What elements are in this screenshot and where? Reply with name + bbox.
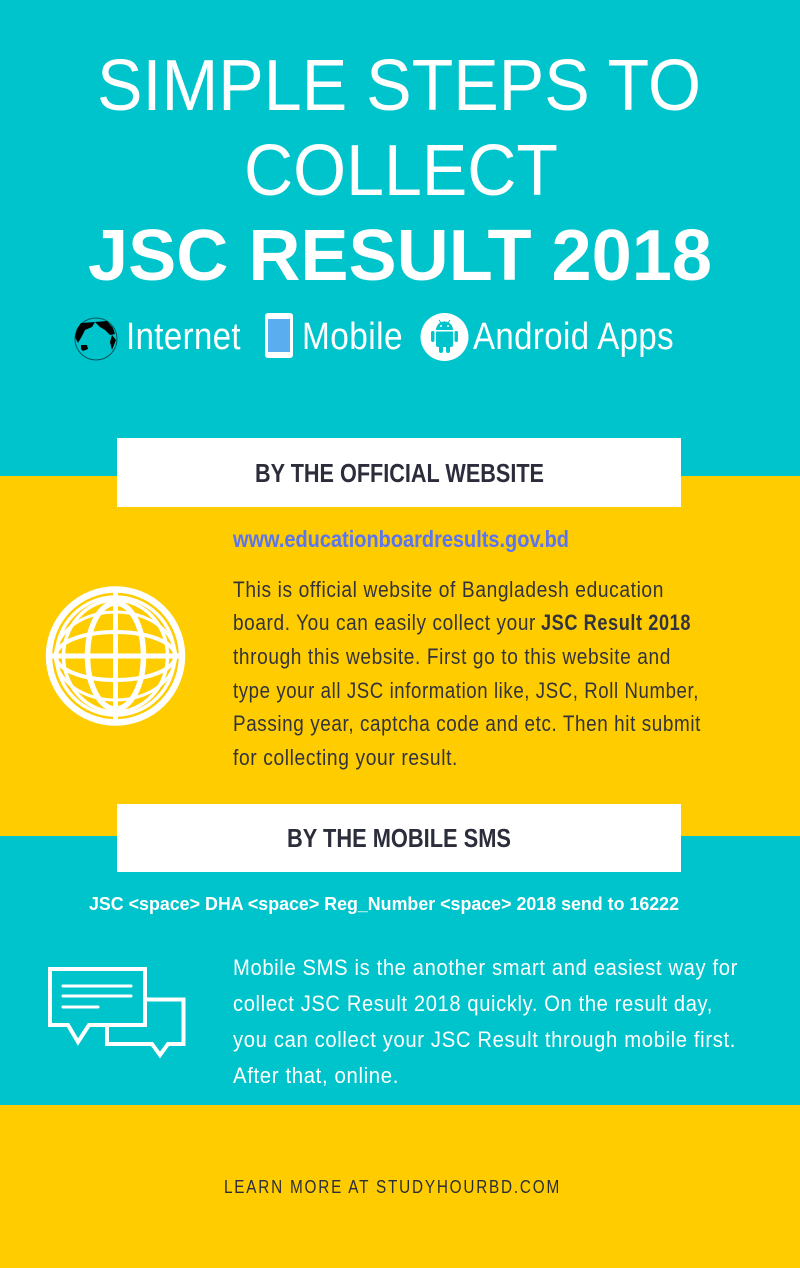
icon: mobile phone: [265, 313, 293, 358]
icon: chat bubbles: [50, 969, 184, 1055]
icon: wireframe globe: [49, 589, 182, 723]
title: JSC RESULT 2018: [88, 216, 712, 296]
title: [88, 46, 712, 296]
text block: SMS description: Mobile SMS is the another smart and easiest way for: [233, 955, 738, 980]
label: Mobile: Mobile: [302, 316, 403, 358]
icon: dark world globe: [75, 318, 117, 360]
label: Internet: Internet: [126, 316, 241, 358]
text block: website description: Passing year, captcha code and etc. Then hit submit: [233, 711, 701, 736]
text block: website description: JSC Result 2018: [541, 610, 691, 635]
text block: SMS description: After that, online.: [233, 1063, 399, 1088]
panel: official website band: [0, 476, 800, 836]
text block: website description: [233, 577, 701, 770]
icon: android: [420, 313, 468, 361]
text block: website description: This is official website of Bangladesh education: [233, 577, 664, 602]
panel: footer band: [0, 1105, 800, 1268]
footer text: LEARN MORE AT STUDYHOURBD.COM: [224, 1177, 561, 1197]
text block: website description: board. You can easily collect your: [233, 610, 536, 635]
background: top teal panel: [0, 0, 800, 476]
title: SIMPLE STEPS TO: [97, 46, 701, 126]
label: Android Apps: Android Apps: [473, 316, 674, 358]
website link: www.educationboardresults.gov.bd: [232, 526, 569, 552]
text block: SMS description: collect JSC Result 2018 quickly. On the result day,: [233, 991, 713, 1016]
text block: website description: for collecting your result.: [233, 745, 458, 770]
heading box: by the mobile SMS: [117, 804, 681, 872]
heading box: by the official website: [117, 438, 681, 507]
title: COLLECT: [244, 131, 558, 211]
text block: website description: through this website. First go to this website and: [233, 644, 671, 669]
text block: website description: type your all JSC information like, JSC, Roll Number,: [233, 678, 699, 703]
text block: SMS description: [233, 955, 738, 1088]
panel: mobile SMS band: [0, 836, 800, 1105]
heading box: by the mobile SMS: BY THE MOBILE SMS: [287, 823, 511, 853]
heading box: by the official website: BY THE OFFICIAL WEBSITE: [255, 458, 544, 488]
text block: SMS description: you can collect your JSC Result through mobile first.: [233, 1027, 736, 1052]
SMS format: JSC <space> DHA <space> Reg_Number <space> 2018 send to 16222: [89, 894, 679, 914]
